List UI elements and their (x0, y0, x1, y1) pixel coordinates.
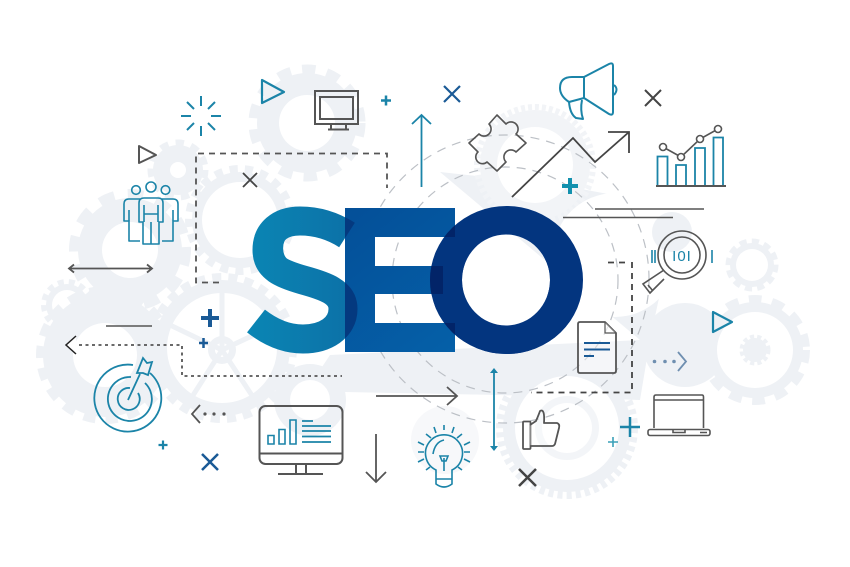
icon: document (578, 322, 616, 373)
arrow down (366, 434, 386, 482)
dashed connector right (531, 262, 632, 392)
cross grey (243, 173, 257, 187)
gear lower right (501, 362, 633, 494)
background gears (41, 71, 803, 494)
cross blue (444, 86, 460, 102)
icon: play triangle right (713, 312, 732, 332)
gear top (255, 71, 359, 175)
arrow up (412, 115, 431, 187)
chevron dots left (192, 405, 226, 423)
plus teal (562, 178, 578, 194)
icon: team of people (124, 182, 178, 244)
dotted connector left (66, 336, 342, 376)
cross dark (645, 90, 661, 106)
cross dark lower (519, 469, 536, 486)
gear bottom centre-left (274, 364, 346, 436)
icon: monitor with charts (260, 406, 342, 474)
chevron dots right (653, 352, 686, 371)
dashed connector top (196, 154, 387, 282)
icon: magnifier (643, 231, 712, 293)
double arrow vertical (490, 368, 498, 451)
gear right (707, 302, 803, 398)
icon: thumbs up (523, 410, 559, 449)
icon: lightbulb (418, 425, 470, 487)
icon: small plus (381, 96, 391, 106)
plus small teal (158, 440, 168, 450)
plus teal large (620, 417, 640, 437)
gear small far left (44, 282, 90, 328)
short line (106, 325, 152, 327)
icon: sunburst (181, 96, 221, 136)
double arrow left (69, 264, 152, 272)
gear dashed box (190, 170, 290, 270)
gear top right (477, 107, 593, 223)
gear right mass (643, 212, 727, 387)
double lines (563, 209, 704, 218)
big gear lower left (152, 278, 292, 418)
gear behind bulb (411, 406, 479, 474)
cross blue lower (202, 454, 218, 470)
dashed circles (361, 135, 649, 423)
gear large right centre (553, 193, 677, 317)
icon: play triangle grey (139, 146, 156, 163)
icon: target with dart (94, 358, 161, 432)
icon: magnifier: I0I (672, 248, 692, 265)
plus blue large (201, 309, 219, 327)
icon: megaphone (560, 63, 616, 119)
SEO wordmark (247, 206, 583, 354)
gear left (76, 196, 184, 304)
icon: laptop (648, 395, 710, 436)
icon: bar chart (656, 126, 726, 186)
SEO wordmark: O (423, 169, 589, 397)
SEO wordmark: S (250, 172, 360, 391)
icon: play triangle teal (262, 80, 284, 103)
central pale mass (310, 172, 665, 400)
icon: puzzle piece (469, 115, 526, 171)
plus teal thin (608, 437, 618, 447)
gear small left upper (152, 144, 204, 196)
SEO wordmark: E (338, 167, 447, 395)
trend arrow (512, 132, 629, 197)
gear small right (729, 242, 775, 288)
arrow right (376, 387, 457, 405)
icon: desktop monitor (315, 91, 358, 130)
plus blue small (199, 338, 208, 348)
arc gear lower left (41, 291, 169, 419)
